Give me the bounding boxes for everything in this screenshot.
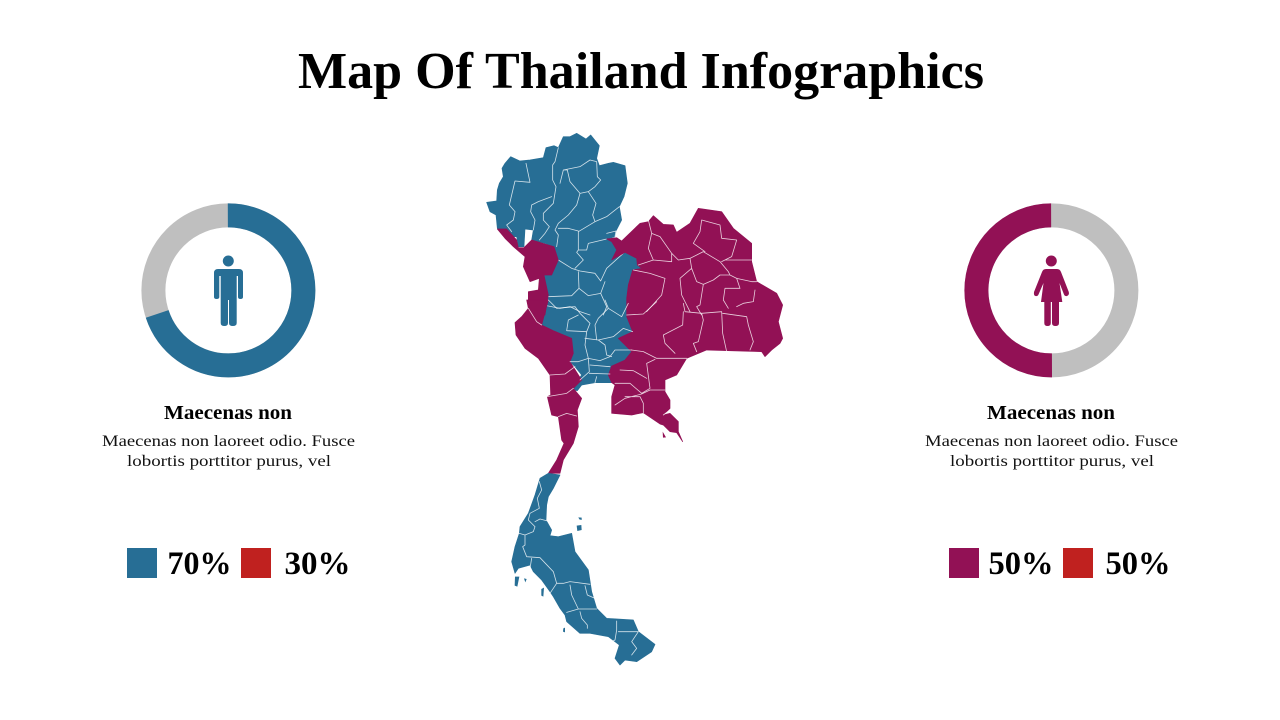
map: southern blue region	[512, 473, 655, 665]
title: Map Of Thailand Infographics	[298, 43, 984, 100]
right body text	[925, 433, 1178, 470]
left legend	[127, 546, 350, 582]
right body text: lobortis porttitor purus, vel	[950, 453, 1155, 470]
right legend: 50%	[988, 546, 1054, 582]
map: north-west purple region	[497, 229, 558, 315]
left body text: lobortis porttitor purus, vel	[127, 453, 332, 470]
right panel	[925, 215, 1178, 582]
right body text: Maecenas non laoreet odio. Fusce	[925, 433, 1178, 450]
icon: woman	[1034, 256, 1069, 326]
left legend: 70%	[168, 546, 232, 582]
right heading: Maecenas non	[987, 402, 1115, 424]
map of Thailand	[487, 133, 783, 665]
right legend	[949, 546, 1170, 582]
map: northern and central blue regions	[487, 133, 642, 391]
icon: man	[214, 256, 243, 326]
right legend: 50%	[1106, 546, 1170, 582]
donut chart: 50 percent	[976, 215, 1126, 365]
map: central purple borders and western strip	[515, 300, 753, 473]
map: north-eastern purple region	[607, 208, 783, 442]
donut chart: 70 percent	[153, 215, 303, 365]
left legend: 30%	[284, 546, 350, 582]
left panel	[102, 215, 355, 582]
left body text	[102, 433, 355, 470]
left heading: Maecenas non	[164, 402, 292, 424]
left body text: Maecenas non laoreet odio. Fusce	[102, 433, 355, 450]
